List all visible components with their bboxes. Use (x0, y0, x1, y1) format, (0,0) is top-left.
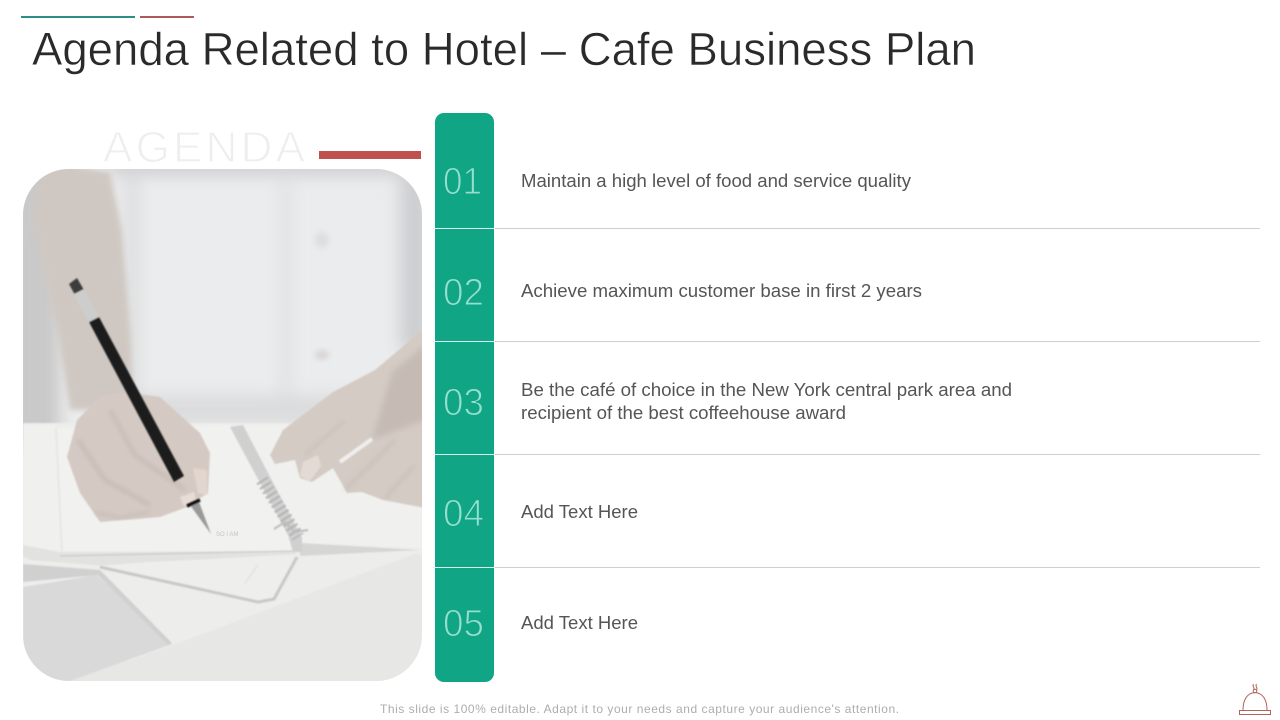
icon: serving cloche (1240, 684, 1270, 714)
number 01: 01 (443, 161, 482, 203)
handwriting: SO I AM (216, 532, 238, 538)
number 02: 02 (443, 272, 484, 314)
writing hand (67, 392, 210, 522)
red accent bar (319, 151, 421, 159)
agenda item 4: Add Text Here (521, 502, 638, 522)
number 05: 05 (443, 603, 484, 645)
header accent: red line (140, 16, 194, 18)
forearm (33, 160, 133, 410)
table surface (23, 422, 414, 566)
footer note: This slide is 100% editable. Adapt it to your needs and capture your audience's attention. (380, 702, 899, 716)
agenda item 3 (521, 380, 1012, 423)
agenda item 1: Maintain a high level of food and service quality (521, 171, 911, 191)
faint AGENDA heading: AGENDA (103, 123, 306, 172)
agenda item 5: Add Text Here (521, 613, 638, 633)
agenda item 3: Be the café of choice in the New York central park area and (521, 380, 1012, 400)
grey laptop corner (23, 564, 172, 681)
pencil (69, 278, 211, 534)
number 04: 04 (443, 493, 484, 535)
numbered teal column (435, 113, 494, 682)
number 03: 03 (443, 382, 484, 424)
agenda item 3: recipient of the best coffeehouse award (521, 403, 846, 423)
wire binding (230, 425, 308, 552)
header accent: teal line (21, 16, 135, 18)
photo: hand writing in notebook (10, 155, 430, 688)
agenda item 2: Achieve maximum customer base in first 2 years (521, 281, 922, 301)
right hand (270, 328, 425, 508)
title: Agenda Related to Hotel – Cafe Business Plan (32, 23, 976, 75)
lower notebook (100, 556, 298, 603)
